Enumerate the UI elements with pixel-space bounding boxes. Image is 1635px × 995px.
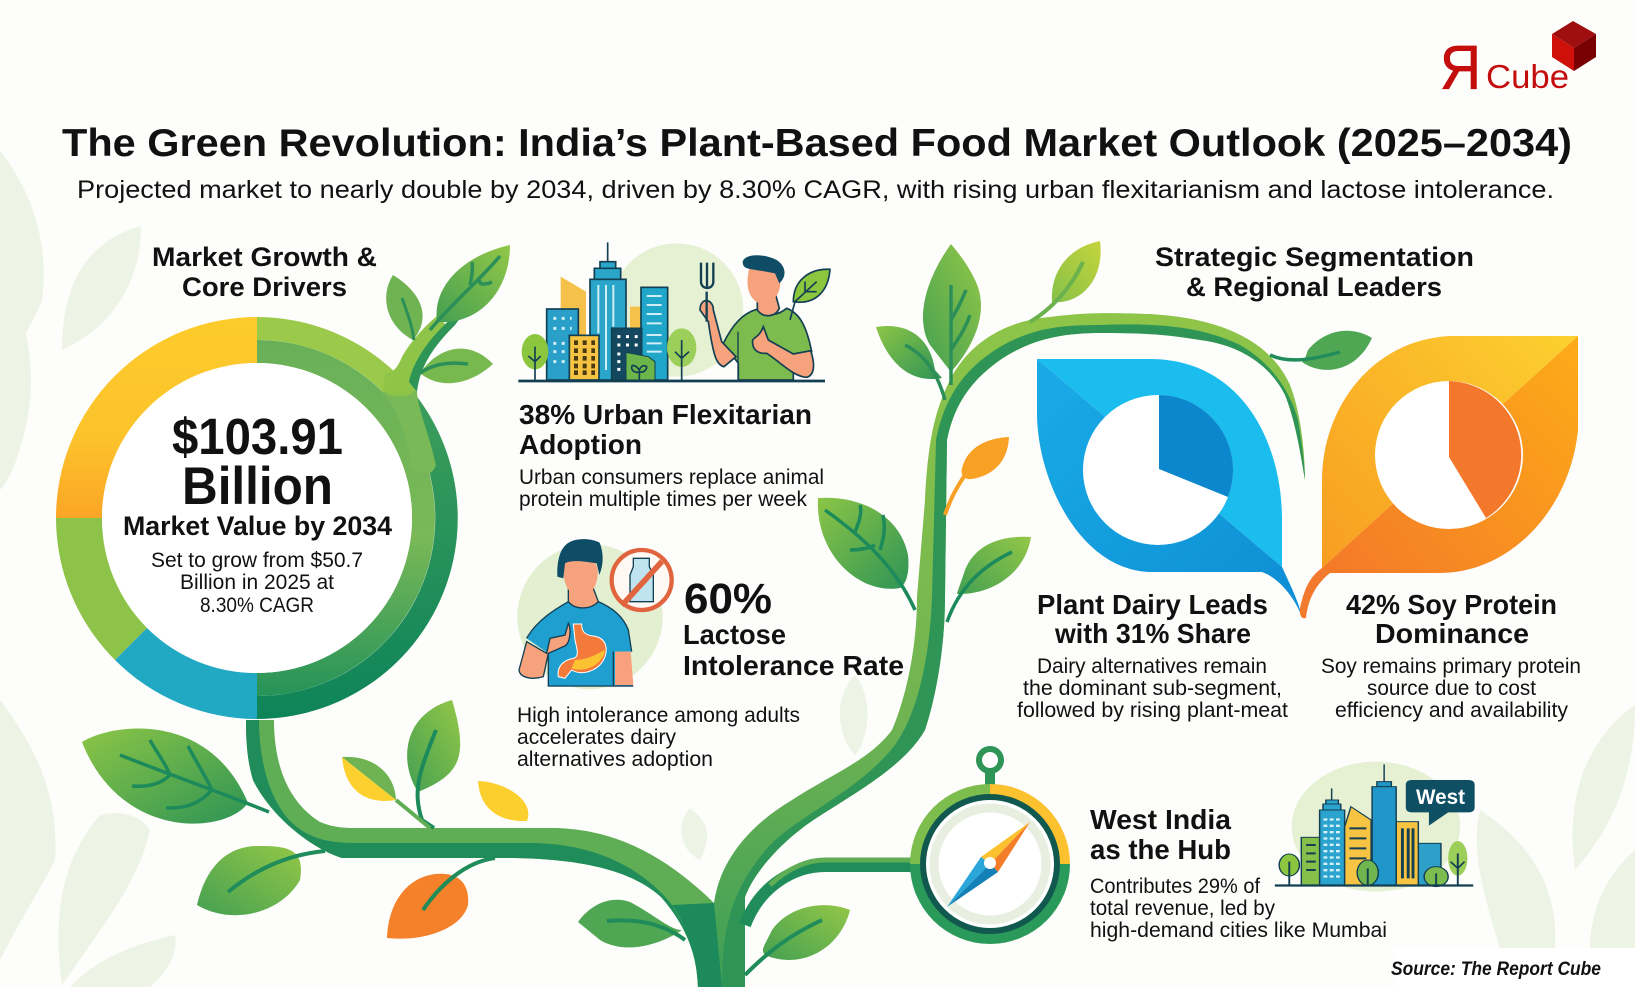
text block: urban flexitarian: 38% Urban Flexitarian [519,399,812,430]
text block: plant dairy [1017,589,1288,722]
text block: soy protein: Dominance [1375,618,1529,649]
text block: soy protein: Soy remains primary protein [1321,655,1581,678]
heading: market growth [152,242,377,302]
text block: urban flexitarian: Adoption [519,429,642,460]
donut centre text: Billion in 2025 at [180,571,334,594]
text block: urban flexitarian [519,399,824,511]
leaf: yellow [478,781,528,821]
text block: soy protein: 42% Soy Protein [1346,589,1557,620]
title: The Green Revolution: India’s Plant-Based Food Market Outlook (2025–2034) [62,122,1572,165]
text block: soy protein [1321,589,1581,722]
leaf: arch right [1270,331,1372,370]
right vine and arch [672,313,1305,987]
text block: west india: Contributes 29% of [1090,875,1260,898]
leaf panel: soy protein pie [1300,336,1578,618]
source strip [0,948,1635,995]
text block: plant dairy: Dairy alternatives remain [1037,655,1267,678]
callout label: West: West [1416,786,1465,809]
illustration: west city [1275,762,1475,892]
leaf: lower left small [197,846,325,915]
text block: soy protein: source due to cost [1367,677,1536,700]
text block: plant dairy: followed by rising plant-meat [1017,699,1288,722]
compass icon [910,749,1070,944]
donut centre text [123,408,392,617]
leaf: stem right [745,905,850,975]
leaf: big lower left [82,729,269,824]
text block: lactose [517,575,904,771]
leaf: two-tone yellow and green [342,757,430,828]
text block: soy protein: efficiency and availability [1335,699,1568,722]
logo: RCube: Cube [1486,58,1569,95]
heading: strategic segmentation: & Regional Leaders [1186,272,1442,302]
logo: RCube [1440,21,1596,103]
heading: market growth: Core Drivers [182,272,347,302]
text block: plant dairy: Plant Dairy Leads [1037,589,1268,620]
leaf: small orange on arch stem [945,437,1009,515]
text block: urban flexitarian: protein multiple times per week [519,488,807,511]
leaf: arch top yellow-green [1030,241,1101,322]
text block: plant dairy: the dominant sub-segment, [1023,677,1282,700]
donut chart: market value [56,317,458,719]
text block: west india [1090,804,1387,942]
leaf: middle right [947,537,1031,622]
sprout stem above donut with leaves [383,245,510,396]
donut centre text: Set to grow from $50.7 [151,549,363,572]
text block: plant dairy: with 31% Share [1054,618,1251,649]
leaf: arch left [876,326,945,400]
text block: urban flexitarian: Urban consumers replace animal [519,466,824,489]
illustration: lactose intolerance [517,539,672,689]
logo: RCube: Я [1440,34,1481,103]
leaf: big middle [818,498,915,610]
heading: strategic segmentation [1155,242,1474,302]
leaf: stem left [578,900,685,947]
heading: market growth: Market Growth & [152,242,377,272]
text block: west india: as the Hub [1090,834,1231,865]
text block: lactose: Intolerance Rate [683,650,904,681]
text block: west india: high-demand cities like Mumbai [1090,919,1387,942]
text block: lactose: Lactose [683,619,786,650]
text block: lactose: 60% [684,575,772,623]
heading: strategic segmentation: Strategic Segmentation [1155,242,1474,272]
text block: west india: West India [1090,804,1231,835]
subtitle: Projected market to nearly double by 2034, driven by 8.30% CAGR, with rising urban flexitarianism and lactose intolerance. [77,176,1554,204]
donut centre text: $103.91 [172,408,343,465]
donut centre text: 8.30% CAGR [200,594,314,617]
leaf: arch top upright [923,244,981,385]
left vine [246,720,745,987]
donut centre text: Market Value by 2034 [123,511,392,541]
donut centre text: Billion [182,457,333,516]
leaf: upright lower [407,700,460,828]
text block: west india: total revenue, led by [1090,897,1275,920]
leaf panel: plant dairy pie [1037,359,1302,617]
illustration: urban flexitarian [518,242,830,382]
source note: Source: The Report Cube [1391,959,1601,980]
leaf: orange [387,858,495,939]
text block: lactose: accelerates dairy [517,726,676,749]
text block: lactose: alternatives adoption [517,748,713,771]
text block: lactose: High intolerance among adults [517,704,800,727]
